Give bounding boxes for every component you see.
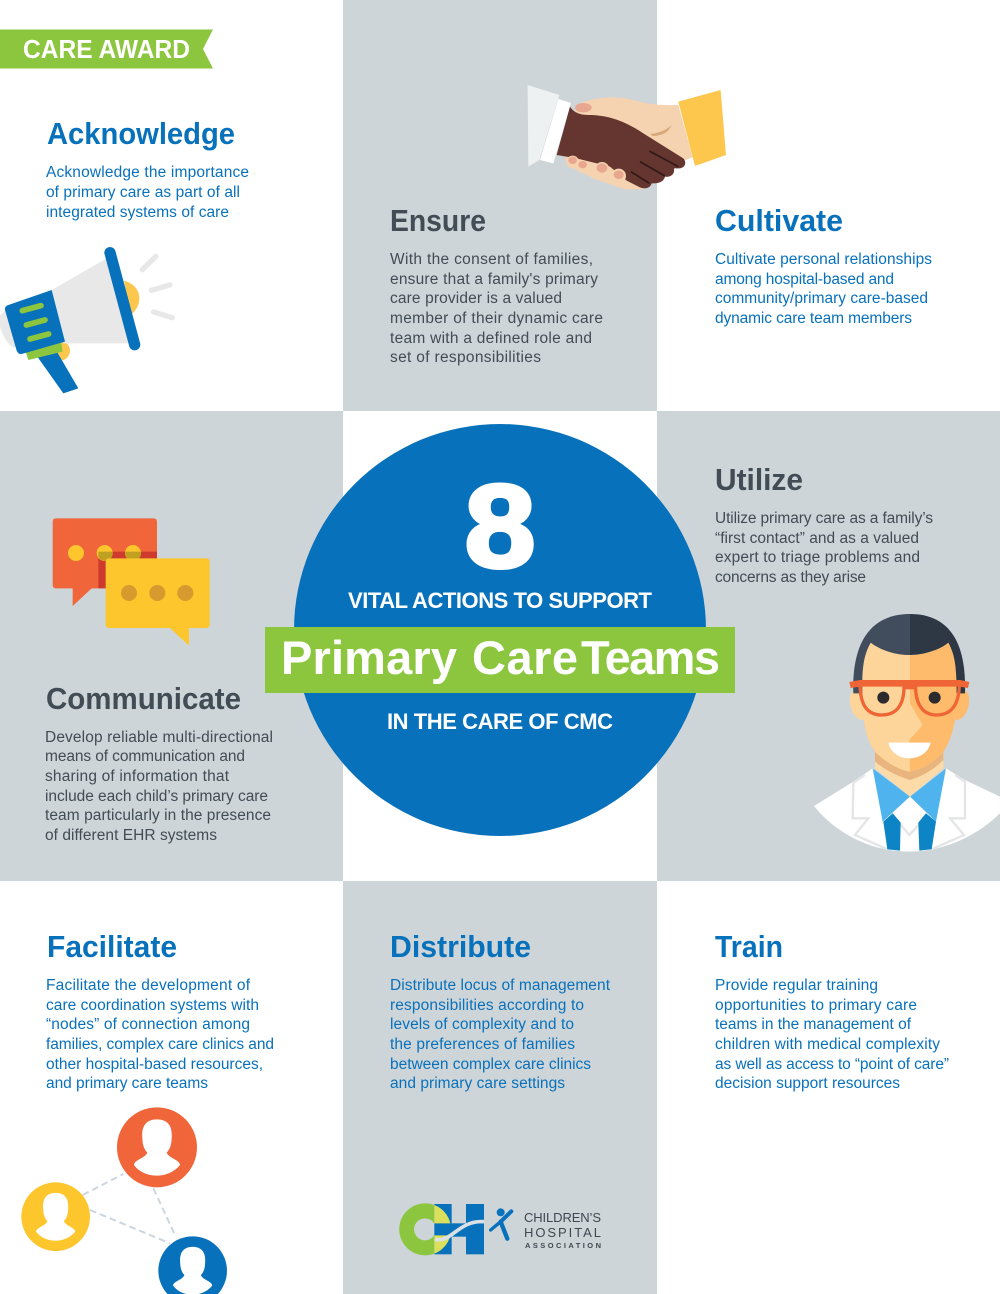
text: utilize body — [715, 510, 933, 586]
text: facilitate body: families, complex care clinics and — [46, 1036, 274, 1053]
icon: megaphone — [0, 253, 172, 393]
text: train body: decision support resources — [715, 1075, 900, 1092]
text: train body: opportunities to primary care — [715, 997, 917, 1014]
text: facilitate body — [46, 977, 274, 1092]
text: distribute body: between complex care clinics — [390, 1056, 591, 1073]
banner: primary care teams: Teams — [581, 631, 720, 684]
logo: children's hospital association — [399, 1203, 601, 1255]
text: in the care of cmc: IN THE CARE OF CMC — [387, 709, 613, 734]
text: distribute body: responsibilities according to — [390, 997, 584, 1014]
heading: facilitate: Facilitate — [47, 929, 177, 964]
text: communicate body: include each child’s primary care — [45, 788, 268, 805]
text: cultivate body: dynamic care team members — [715, 310, 912, 327]
text: cultivate body: among hospital-based and — [715, 271, 894, 288]
text: facilitate body: “nodes” of connection among — [46, 1016, 250, 1033]
icon: handshake — [528, 85, 726, 189]
heading: utilize: Utilize — [715, 462, 803, 497]
text: train body: teams in the management of — [715, 1016, 912, 1033]
logo: children's hospital association: HOSPITAL — [524, 1225, 601, 1240]
icon: chat bubbles — [53, 518, 210, 646]
text: ensure body — [390, 251, 603, 366]
text: distribute body: the preferences of families — [390, 1036, 575, 1053]
number: 8: 8 — [465, 461, 535, 593]
text: acknowledge body: Acknowledge the importance — [46, 164, 249, 181]
text: communicate body: sharing of information that — [45, 768, 230, 785]
text: train body — [715, 977, 949, 1092]
text: distribute body: and primary care settings — [390, 1075, 565, 1092]
text: facilitate body: and primary care teams — [46, 1075, 208, 1092]
ribbon: care award — [0, 30, 213, 68]
text: distribute body — [390, 977, 611, 1092]
text: ensure body: member of their dynamic care — [390, 310, 603, 327]
text: cultivate body: community/primary care-based — [715, 290, 928, 307]
text: communicate body: Develop reliable multi-directional — [45, 729, 273, 746]
text: acknowledge body: of primary care as part of all — [46, 184, 240, 201]
text: vital actions: VITAL ACTIONS TO SUPPORT — [348, 588, 653, 613]
text: ensure body: ensure that a family's primary — [390, 271, 598, 288]
text: utilize body: concerns as they arise — [715, 569, 866, 586]
text: communicate body: of different EHR systems — [45, 827, 217, 844]
heading: communicate: Communicate — [46, 681, 241, 716]
central circle — [294, 424, 706, 836]
ribbon: care award: CARE AWARD — [23, 36, 190, 64]
text: communicate body: means of communication and — [45, 748, 245, 765]
text: train body: children with medical complexity — [715, 1036, 940, 1053]
text: facilitate body: care coordination systems with — [46, 997, 259, 1014]
text: utilize body: Utilize primary care as a family’s — [715, 510, 933, 527]
text: acknowledge body — [46, 164, 249, 221]
text: train body: as well as access to “point of care” — [715, 1056, 949, 1073]
text: ensure body: care provider is a valued — [390, 290, 562, 307]
text: cultivate body: Cultivate personal relationships — [715, 251, 932, 268]
icon: doctor — [814, 614, 1000, 852]
text: utilize body: expert to triage problems and — [715, 549, 920, 566]
text: distribute body: Distribute locus of management — [390, 977, 611, 994]
icon: connected people — [21, 1107, 227, 1294]
text: ensure body: With the consent of families, — [390, 251, 593, 268]
text: acknowledge body: integrated systems of care — [46, 204, 229, 221]
heading: train: Train — [715, 929, 783, 964]
heading: acknowledge: Acknowledge — [47, 116, 235, 151]
text: ensure body: set of responsibilities — [390, 349, 541, 366]
text: facilitate body: Facilitate the development of — [46, 977, 251, 994]
text: communicate body: team particularly in the presence — [45, 807, 271, 824]
banner: primary care teams: Care — [472, 631, 578, 684]
heading: distribute: Distribute — [390, 929, 531, 964]
heading: cultivate: Cultivate — [715, 203, 843, 238]
text: facilitate body: other hospital-based resources, — [46, 1056, 263, 1073]
text: train body: Provide regular training — [715, 977, 878, 994]
text: utilize body: “first contact” and as a valued — [715, 530, 919, 547]
text: cultivate body — [715, 251, 932, 327]
text: distribute body: levels of complexity and to — [390, 1016, 574, 1033]
heading: ensure: Ensure — [390, 203, 486, 238]
banner: primary care teams — [265, 627, 735, 693]
banner: primary care teams: Primary — [281, 631, 457, 684]
logo: children's hospital association: CHILDREN’S — [524, 1210, 601, 1225]
text: communicate body — [45, 729, 273, 844]
text: ensure body: team with a defined role and — [390, 330, 592, 347]
logo: children's hospital association: ASSOCIATION — [525, 1241, 601, 1250]
